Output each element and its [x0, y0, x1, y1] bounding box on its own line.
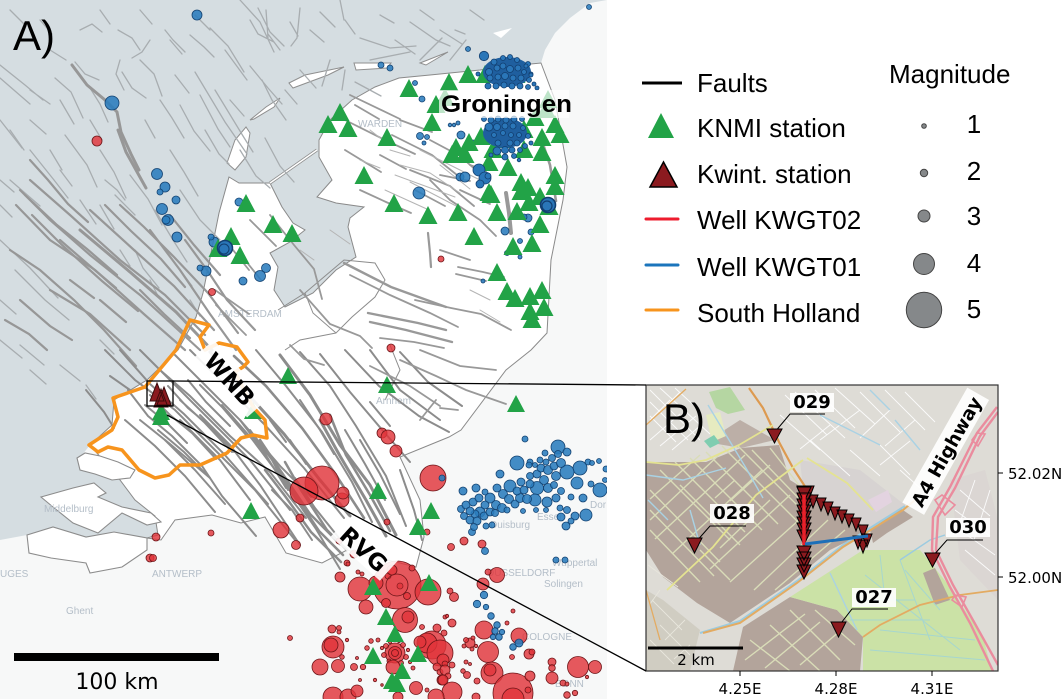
zoom connector lines from panel A to panel B — [167, 381, 646, 671]
magnitude 1: 1 — [967, 109, 981, 139]
west residential blocks — [646, 590, 700, 671]
Zeeland islands — [27, 453, 161, 573]
well KWGT01 track — [805, 536, 868, 544]
panel letter B: B) — [663, 395, 705, 442]
Dutch mainland — [90, 63, 567, 567]
magnitude 4: 4 — [967, 248, 981, 278]
legend item: South Holland: South Holland — [697, 298, 860, 328]
legend item: faults: Faults — [697, 68, 768, 98]
South Holland outline — [89, 320, 267, 478]
legend item: faults — [642, 68, 768, 98]
station 029 — [767, 392, 834, 443]
land background — [0, 0, 607, 699]
city labels: Dor — [590, 500, 607, 511]
inset base map — [646, 385, 998, 671]
magnitude 5 — [906, 292, 981, 328]
panel letter A: A) — [13, 12, 55, 59]
magnitude 3 — [918, 201, 981, 231]
magnitude 4 — [914, 248, 981, 278]
main roads — [646, 388, 998, 640]
scale bar 2 km — [648, 648, 743, 669]
earthquakes: Groningen gas-field cluster — [218, 51, 556, 255]
city labels: Solingen — [544, 579, 583, 590]
label: WNB: WNB — [198, 348, 259, 412]
axis ticks and coordinate labels: 4.25E — [719, 680, 761, 698]
canals and ditches — [646, 390, 985, 660]
station 028 — [687, 503, 754, 553]
city labels: Wuppertal — [552, 558, 597, 569]
green triangles: KNMI stations — [152, 62, 570, 692]
city labels: ANTWERP — [152, 569, 202, 580]
legend item: Kwint. station: Kwint. station — [697, 159, 852, 189]
city labels: Essen — [537, 512, 565, 523]
axis ticks and coordinate labels: 4.28E — [815, 680, 857, 698]
scale bar 2 km: 2 km — [677, 651, 715, 669]
station 027 — [831, 587, 896, 637]
field boundaries — [650, 446, 855, 671]
label: Groningen: Groningen — [441, 91, 572, 118]
well KWGT02 track — [802, 495, 806, 545]
axis ticks and coordinate labels: 4.31E — [911, 680, 953, 698]
station 027: 027 — [855, 587, 893, 608]
city labels: COLOGNE — [522, 632, 572, 643]
panel B: inset map of Kwintsheul area — [646, 385, 1062, 698]
magnitude 3: 3 — [967, 201, 981, 231]
faults: South Holland and Roer Valley — [86, 350, 462, 569]
magnitude 5: 5 — [967, 294, 981, 324]
scale bar 100 km — [14, 653, 219, 690]
city labels: WARDEN — [358, 119, 402, 130]
sea — [0, 0, 607, 540]
city labels: UGES — [0, 569, 29, 580]
faults: onshore north and east — [215, 95, 556, 420]
meadow — [790, 550, 992, 671]
inset frame — [646, 385, 998, 671]
faults: offshore north — [0, 0, 484, 399]
urban east and parks — [800, 460, 905, 530]
magnitude 1 — [922, 109, 981, 139]
earthquakes: blue, Ruhr cluster and scattered — [105, 4, 609, 650]
legend: symbols — [642, 68, 861, 328]
axis ticks and coordinate labels: 52.02N — [1008, 465, 1062, 483]
city labels: Duisburg — [490, 520, 530, 531]
scale bar 100 km: 100 km — [75, 670, 159, 695]
magnitude 2: 2 — [967, 156, 981, 186]
legend item: Well KWGT01: Well KWGT01 — [697, 252, 861, 282]
station 028: 028 — [713, 503, 751, 524]
legend: magnitude scale — [889, 59, 1010, 328]
city labels: Middelburg — [44, 504, 93, 515]
station 030 — [925, 517, 990, 567]
city labels: Ghent — [66, 606, 93, 617]
label: RVG: RVG — [334, 522, 392, 578]
greenhouse areas — [646, 420, 913, 671]
Wadden islands and Afsluitdijk — [227, 28, 512, 183]
legend item: KNMI station: KNMI station — [697, 113, 846, 143]
magnitude 2 — [920, 156, 981, 186]
axis ticks and coordinate labels: 52.00N — [1008, 569, 1062, 587]
legend item: Well KWGT02: Well KWGT02 — [697, 205, 861, 235]
residential street mesh — [648, 388, 995, 664]
city labels: BONN — [555, 679, 584, 690]
label: A4 Highway: A4 Highway — [908, 394, 987, 511]
well tracks and station triangles — [797, 486, 872, 579]
station 029: 029 — [793, 392, 831, 413]
panel A: map of the Netherlands — [0, 0, 609, 699]
city labels: AMSTERDAM — [218, 309, 282, 320]
city labels: Arnhem — [376, 396, 411, 407]
earthquakes: red, tectonic, magnitude scaled — [92, 136, 602, 699]
city labels: DUSSELDORF — [487, 568, 555, 579]
faults: main NW-SE band — [5, 65, 255, 366]
city labels — [0, 119, 607, 690]
station 030: 030 — [949, 517, 987, 538]
Flevoland and dyke outlines — [278, 260, 400, 400]
A4 highway — [932, 407, 998, 671]
Kwintsheul station cluster with inset box — [147, 381, 173, 407]
magnitude heading: Magnitude — [889, 59, 1010, 89]
axis ticks and coordinate labels — [719, 465, 1062, 698]
